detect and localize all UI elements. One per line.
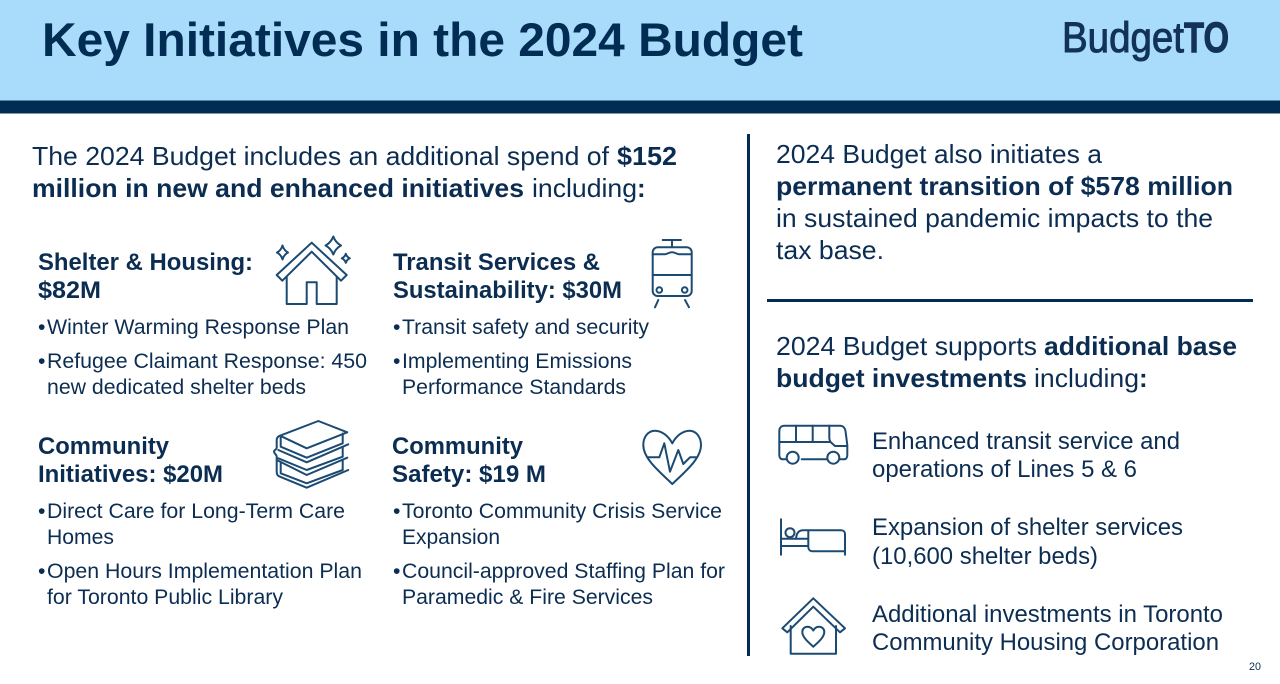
vertical divider xyxy=(747,134,750,656)
text: community housing investments: Additional investments in Toronto xyxy=(872,601,1223,628)
bullet list: shelter and housing: new dedicated shelter beds xyxy=(47,376,306,399)
text: permanent transition: in sustained pandemic impacts to the xyxy=(776,203,1213,233)
title: Key Initiatives in the 2024 Budget xyxy=(42,13,803,66)
heading: transit services and sustainability xyxy=(393,249,622,304)
bullet list: community safety: Paramedic & Fire Services xyxy=(402,586,653,609)
icon: bed xyxy=(781,519,845,555)
intro text: $152 xyxy=(617,141,677,171)
bullet list: community initiatives: for Toronto Public Library xyxy=(47,586,283,609)
heading: community safety: Safety: $19 M xyxy=(392,461,546,488)
bullet list: transit: Implementing Emissions xyxy=(402,350,632,373)
item: expansion of shelter services xyxy=(781,514,1183,570)
horizontal divider xyxy=(767,299,1253,302)
panel: transit services and sustainability xyxy=(393,240,692,399)
page number: 20 xyxy=(1249,661,1261,673)
text: additional base budget investments: : xyxy=(1139,363,1148,393)
panel: community initiatives xyxy=(38,421,362,609)
panel: community safety xyxy=(392,431,725,609)
icon: house with heart xyxy=(782,598,845,654)
heading: community initiatives xyxy=(38,433,223,488)
heading: transit services and sustainability: Transit Services & xyxy=(393,249,600,276)
intro text: : xyxy=(637,173,646,203)
text: additional base budget investments: including xyxy=(1034,363,1139,393)
panel: shelter and housing xyxy=(38,236,367,399)
text: permanent transition xyxy=(776,139,1233,265)
bullet list: community initiatives: Homes xyxy=(47,526,114,549)
text: expansion of shelter services: Expansion of shelter services xyxy=(872,514,1183,541)
bullet list: community initiatives: • xyxy=(38,500,45,523)
item: community housing investments xyxy=(782,598,1223,656)
text: permanent transition: permanent transition of $578 million xyxy=(776,171,1233,201)
intro text xyxy=(32,141,677,203)
bullet list: shelter and housing xyxy=(38,316,367,399)
bullet list: transit: • xyxy=(393,316,400,339)
bullet list: transit: • xyxy=(393,350,400,373)
heading: shelter and housing xyxy=(38,249,253,304)
text: additional base budget investments: additional base xyxy=(1044,331,1237,361)
icon: streetcar xyxy=(653,240,692,307)
text: enhanced transit service xyxy=(872,428,1180,483)
item: enhanced transit service xyxy=(779,426,1180,483)
bullet list: transit: Transit safety and security xyxy=(402,316,649,339)
text: permanent transition: tax base. xyxy=(776,235,884,265)
text: community housing investments: Community Housing Corporation xyxy=(872,629,1219,656)
heading: community safety xyxy=(392,433,546,488)
bullet list: shelter and housing: Winter Warming Response Plan xyxy=(47,316,349,339)
bullet list: transit: Performance Standards xyxy=(402,376,626,399)
bullet list: transit xyxy=(393,316,649,399)
text: additional base budget investments: budget investments xyxy=(776,363,1027,393)
bullet list: community initiatives xyxy=(38,500,362,609)
icon: bus xyxy=(779,426,847,464)
text: expansion of shelter services: (10,600 shelter beds) xyxy=(872,543,1098,570)
bullet list: community safety: • xyxy=(393,500,400,523)
intro text: million in new and enhanced initiatives xyxy=(32,173,524,203)
text: additional base budget investments xyxy=(776,331,1237,393)
heading: community safety: Community xyxy=(392,433,524,460)
heading: shelter and housing: Shelter & Housing: xyxy=(38,249,253,276)
intro text: including xyxy=(532,173,637,203)
header band xyxy=(0,0,1280,114)
bullet list: shelter and housing: • xyxy=(38,350,45,373)
bullet list: community initiatives: • xyxy=(38,560,45,583)
bullet list: community safety: • xyxy=(393,560,400,583)
text: enhanced transit service: operations of Lines 5 & 6 xyxy=(872,456,1137,483)
text: expansion of shelter services xyxy=(872,514,1183,570)
intro text: The 2024 Budget includes an additional spend of xyxy=(32,141,610,171)
bullet list: community safety xyxy=(393,500,725,609)
logo: BudgetTO: Budget xyxy=(1062,14,1184,62)
icon: sparkling house xyxy=(277,236,350,304)
heading: community initiatives: Initiatives: $20M xyxy=(38,461,223,488)
bullet list: community safety: Toronto Community Crisis Service xyxy=(402,500,722,523)
text: additional base budget investments: 2024 Budget supports xyxy=(776,331,1037,361)
bullet list: shelter and housing: • xyxy=(38,316,45,339)
bullet list: community safety: Expansion xyxy=(402,526,500,549)
text: community housing investments xyxy=(872,601,1223,656)
heading: transit services and sustainability: Sustainability: $30M xyxy=(393,277,622,304)
icon: heart with pulse line xyxy=(643,431,701,484)
bullet list: shelter and housing: Refugee Claimant Response: 450 xyxy=(47,350,367,373)
icon: stack of books xyxy=(274,421,348,488)
logo: BudgetTO: TO xyxy=(1184,14,1229,62)
heading: community initiatives: Community xyxy=(38,433,170,460)
bullet list: community initiatives: Direct Care for Long-Term Care xyxy=(47,500,345,523)
text: permanent transition: 2024 Budget also initiates a xyxy=(776,139,1103,169)
bullet list: community initiatives: Open Hours Implementation Plan xyxy=(47,560,362,583)
bullet list: community safety: Council-approved Staffing Plan for xyxy=(402,560,725,583)
heading: shelter and housing: $82M xyxy=(38,277,101,304)
text: enhanced transit service: Enhanced transit service and xyxy=(872,428,1180,455)
